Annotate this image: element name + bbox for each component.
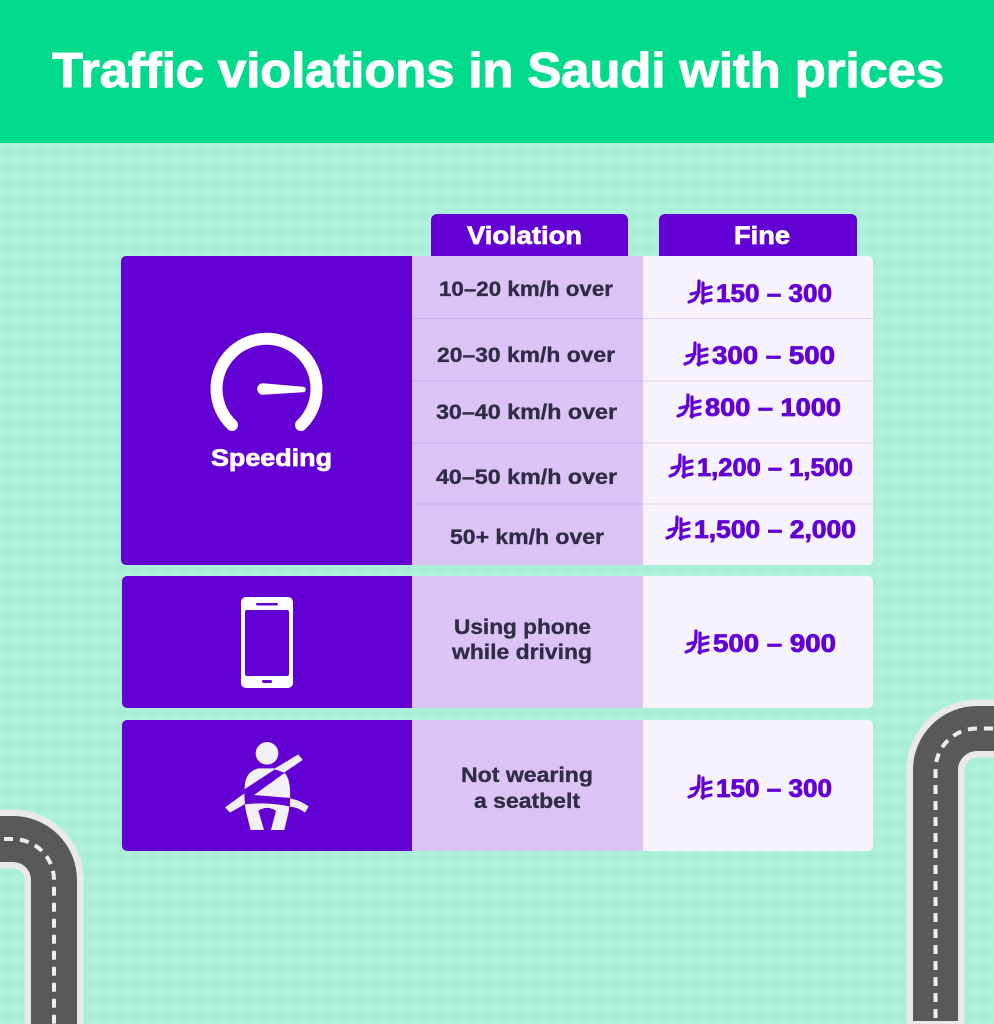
road: bottom right [936, 728, 994, 1024]
label: Speeding: Speeding [211, 445, 332, 472]
header banner [0, 0, 994, 143]
row: 40-50: 1,200 – 1,500 [697, 454, 853, 482]
speeding category cell [121, 256, 412, 565]
column header: Fine: Fine [734, 222, 790, 250]
icon: speedometer [216, 339, 317, 425]
panel: seatbelt [122, 720, 873, 851]
column header: Violation [431, 214, 628, 256]
icon: phone [241, 597, 293, 688]
row: 20-30: 20–30 km/h over [437, 344, 615, 367]
violation text: seatbelt: Not wearing [461, 764, 593, 787]
column header: Fine [659, 214, 857, 256]
road: bottom left [0, 839, 54, 1024]
violation text: phone: while driving [451, 641, 592, 664]
fine: seatbelt: 150 – 300 [716, 775, 832, 803]
row: 40-50 [436, 454, 853, 489]
title: Traffic violations in Saudi with prices [52, 44, 944, 98]
icon: seatbelt [225, 742, 309, 830]
violation text: seatbelt: a seatbelt [474, 790, 580, 813]
row: 10-20 [439, 278, 832, 308]
row: 30-40 [436, 394, 841, 424]
row: 50+: 50+ km/h over [450, 526, 604, 549]
violation text: phone: Using phone [454, 616, 591, 639]
row: 50+: 1,500 – 2,000 [694, 516, 856, 544]
row: 40-50: 40–50 km/h over [436, 466, 617, 489]
panel: speeding [121, 256, 873, 565]
fine column [643, 256, 873, 565]
row: 50+ [450, 516, 856, 549]
row: 20-30: 300 – 500 [712, 342, 835, 370]
row: 30-40: 800 – 1000 [705, 394, 841, 422]
violation text: phone [451, 616, 592, 664]
row: 10-20: 10–20 km/h over [439, 278, 613, 301]
row: 20-30 [437, 342, 835, 370]
row: 10-20: 150 – 300 [716, 280, 832, 308]
violation column [412, 256, 643, 565]
panel: phone [122, 576, 873, 708]
row: 30-40: 30–40 km/h over [436, 401, 617, 424]
column header: Violation: Violation [467, 222, 582, 250]
violation text: seatbelt [461, 764, 593, 813]
fine: phone: 500 – 900 [713, 630, 836, 658]
